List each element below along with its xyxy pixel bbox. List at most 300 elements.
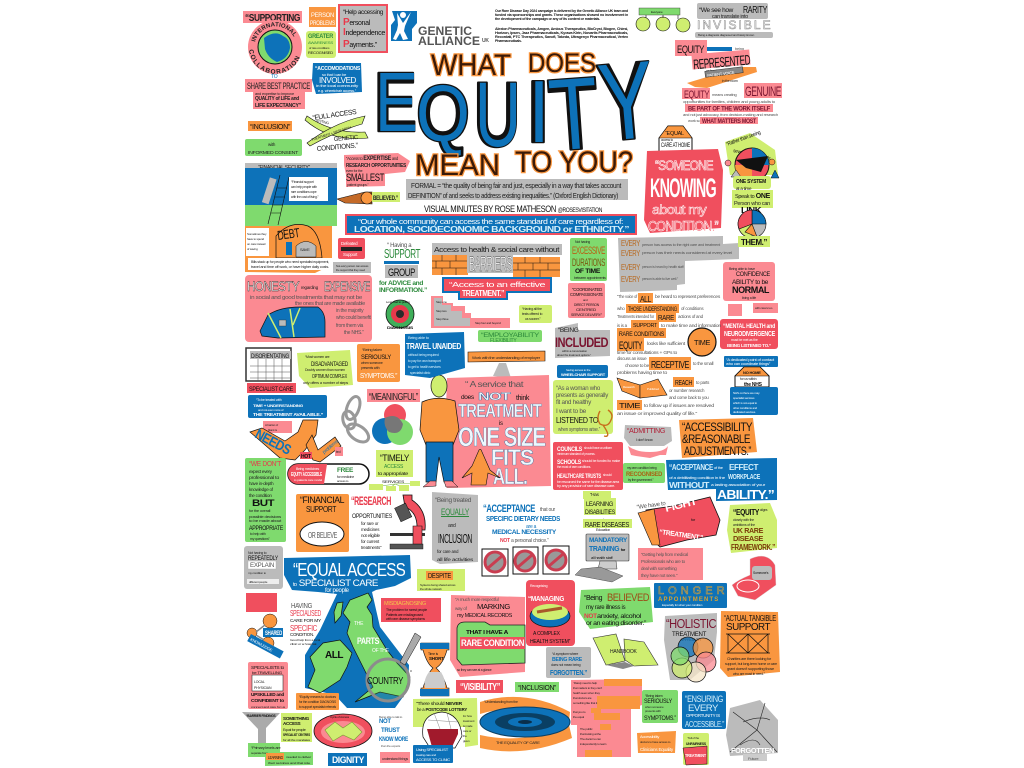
- panel: green bottom left: their services and that role: [268, 761, 311, 765]
- text block: not trust know more: Being able to talk to: [379, 715, 403, 719]
- panel: someone knowing about my condition: KNOWING: [650, 173, 716, 203]
- panel: travel unaided: specialist clinic: [410, 371, 431, 375]
- panel: rather than seeing several professionals: [725, 130, 779, 182]
- panel: fight for treatment glove: [636, 495, 720, 547]
- panel: travel unaided: without being required: [408, 353, 439, 357]
- text block: campaign statement and sponsors: Recordati, PTC Therapeutics, Sanofi, Takeda, Ultragenyx Pharmaceutical, Vertex: [495, 35, 628, 39]
- panel: financial security scene: [245, 163, 337, 273]
- panel: long pink text: the equal: [573, 715, 584, 719]
- panel: admitting teeth: [624, 425, 672, 458]
- panel: chemists schools and trusts: HEALTHCARE TRUSTS: [557, 473, 602, 480]
- panel: we don't expect: my questions”: [250, 537, 271, 541]
- panel: timely access: ACCESS: [384, 464, 404, 470]
- panel: full access to genetic conditions: “FULL ACCESS: [312, 109, 357, 122]
- panel: being treated equally and inclusion: EQUALLY: [441, 507, 470, 518]
- panel: specialists travelling: [248, 662, 288, 709]
- panel: equity means genuine: WHAT MATTERS MOST: [702, 119, 757, 125]
- panel: visibility: [456, 680, 503, 693]
- panel: disadvantaged women: DISADVANTAGED: [311, 361, 348, 368]
- panel: equal access to specialist care map: OF THE: [372, 648, 390, 654]
- panel: getting help from medical professionals: Professionals who are to: [641, 559, 686, 564]
- panel: getting help from medical professionals: they have not seen.”: [641, 573, 678, 578]
- panel: whole community statement: LOCATION, SOCIOECONOMIC BACKGROUND or ETHNICITY.”: [354, 225, 630, 234]
- panel: being taken seriously green: when someone: [645, 705, 664, 709]
- icon: needs arm wrestle: HOT: [301, 454, 311, 460]
- panel: financial security scene: travel and time off work, or have higher daily costs.: [251, 265, 329, 269]
- chart: linked pie: [738, 210, 766, 238]
- panel: financial security scene: have to spend: [247, 237, 264, 241]
- bricks: [432, 255, 468, 275]
- icon: free pill: FREE: [337, 467, 354, 474]
- panel: financial security scene: rare conditions cope: [291, 190, 317, 194]
- panel: recognised: RECOGNISED: [626, 472, 663, 478]
- panel: long pink text: health seen when they: [573, 691, 601, 695]
- credit: visual minutes: VISUAL MINUTES BY ROSE MATHESON @ROSESVISITATION: [424, 204, 602, 214]
- title: what does equity mean to you: [374, 38, 659, 182]
- panel: mental health and neurodivergence: BEING LISTENED TO.”: [727, 343, 771, 348]
- panel: postcode lottery: for how: [463, 714, 473, 718]
- panel: being included: INCLUDED: [555, 334, 608, 350]
- panel: rarity invisible: [695, 3, 773, 38]
- panel: employability flexibility: [478, 330, 542, 344]
- panel: every: [618, 236, 739, 292]
- panel: being rare not forgotten: FORGOTTEN.”: [550, 668, 587, 677]
- panel: whole community statement: “Our whole community can access the same standard of care regardless of:: [358, 217, 623, 226]
- note white: [289, 177, 328, 201]
- debt cave: [276, 224, 322, 258]
- panel: ensuring every opportunity: “ENSURING: [685, 694, 723, 704]
- panel: equity framework: FRAMEWORK.”: [731, 543, 775, 552]
- panel: access to an effective treatment: “Access to an effective: [449, 282, 546, 289]
- panel: equity means genuine: and not just advocacy, from decision-making and research: [683, 112, 778, 117]
- panel: financial security scene: can help people with: [291, 185, 317, 189]
- panel: green bottom left: LEARNING: [268, 755, 284, 760]
- panel: expertise and research opportunities: SMALLEST: [346, 172, 385, 184]
- panel: being believed: [579, 587, 653, 629]
- panel: one size fits all: NOT: [478, 391, 511, 403]
- text block: having specialised care: CARE FOR MY: [290, 618, 321, 623]
- panel: ensuring every opportunity: EVERY: [688, 703, 718, 713]
- panel: acceptance of effect: of the: [714, 465, 724, 470]
- panel: equity represented: [675, 40, 757, 88]
- icon: orange gown: [462, 449, 500, 485]
- panel: financial security scene: Sometimes they: [247, 232, 267, 236]
- icon: open orange book: Published: [647, 387, 659, 391]
- panel: postcode lottery: [413, 698, 478, 747]
- panel: we don't expect: professional to: [249, 475, 280, 480]
- panel: long pink text: independently to learn: [580, 742, 607, 746]
- panel: accommodations: “ACCOMODATIONS: [315, 66, 361, 72]
- panel: blue people note: treating care and: [416, 753, 436, 757]
- panel: greater awareness: [306, 31, 336, 58]
- panel: full access to genetic conditions: GENETIC: [334, 135, 359, 143]
- icon: NHS house: NO HOME: [743, 370, 761, 375]
- panel: actual tangible support: Charities are there looking for: [727, 657, 772, 661]
- small pink note: understand things: [382, 756, 408, 761]
- panel: green bottom left: [248, 743, 313, 766]
- panel: chemists schools and trusts: SCHOOLS: [557, 459, 582, 466]
- panel: accommodations: INVOLVED: [319, 75, 356, 85]
- panel: excessive durations of time: Not having: [575, 240, 590, 244]
- panel: blue NHS support text: other conditions and: [733, 406, 758, 410]
- panel: one size fits all: TREATMENT: [458, 401, 542, 421]
- panel: to be treated as blue: THE TREATMENT AVAILABLE.”: [253, 412, 323, 417]
- panel: greater awareness: AWARENESS: [308, 40, 334, 45]
- icon: orange bench: Work with the understanding of employer: [472, 356, 541, 360]
- panel: holistic treatment: [664, 613, 717, 682]
- panel: misdiagnosing red: with rare disease symptoms: [386, 617, 425, 621]
- label: inclusion orange: “INCLUSION”: [250, 122, 291, 131]
- panel: whole community statement: [346, 215, 636, 234]
- panel: financial support: [296, 494, 349, 552]
- icon: red cell oval: [314, 714, 372, 748]
- panel: we don't expect: the condition: [249, 493, 272, 498]
- panel: one size fits all: ONE SIZE: [458, 422, 545, 452]
- panel: being included: [555, 323, 610, 358]
- panel: to be treated as blue: TIME + UNDERSTANDING: [253, 403, 303, 408]
- panel: being treated equally and inclusion: and: [448, 523, 456, 529]
- text block: voice of all: REACH: [675, 380, 692, 387]
- icon: shared network nodes: KNOWLEDGE: [249, 637, 274, 653]
- panel: every: person has access to the right care and treatment: [642, 243, 720, 247]
- panel: personal independence payments: “Help accessing: [343, 9, 384, 16]
- panel: honesty regarding expense: [245, 275, 372, 342]
- panel: financial support: OR BELIEVE: [308, 531, 337, 540]
- title word: equity: I: [527, 62, 549, 161]
- panel: timely access: [369, 450, 420, 491]
- panel: being believed: anxiety, alcohol: [597, 614, 641, 620]
- icon: forgotten spider web cube: FORGOTTEN: [731, 748, 774, 755]
- title word: equity: Y: [594, 38, 659, 165]
- panel: repeatedly explain: [244, 546, 283, 589]
- icon: globe and bingo lottery: [423, 712, 462, 748]
- text block: voice of all: choose to be: [625, 363, 650, 368]
- panel: being rare not forgotten: “A symptom where: [552, 652, 578, 656]
- title line: mean to you: [415, 146, 633, 182]
- panel: one size fits all: does: [461, 394, 475, 401]
- panel: having all the tests: [519, 305, 552, 323]
- text block: voice of all: “The voice of: [617, 294, 638, 299]
- panel: chemists schools and trusts: be resourced the same for the disease area: [557, 480, 619, 484]
- panel: we don't expect: for the overall: [249, 508, 271, 513]
- panel: being taken seriously: presents with: [361, 366, 380, 370]
- panel: recognised: my rare condition being: [627, 466, 657, 470]
- icon: NHS house: [735, 367, 769, 388]
- panel: being rare not forgotten: does not mean being: [551, 663, 581, 667]
- panel: expertise and research opportunities: “Access to EXPERTISE and: [346, 156, 399, 162]
- panel: research opportunities: [351, 495, 425, 550]
- panel: defeated support: [338, 238, 365, 259]
- panel: learning disabilities and rare diseases: and: [598, 517, 604, 522]
- panel: lime small note: for all the mandates: [283, 738, 311, 742]
- panel: employability flexibility: “EMPLOYABILITY: [481, 332, 540, 339]
- panel: postcode lottery: given: [463, 739, 470, 743]
- icon: needs arm wrestle: NEEDS: [253, 426, 294, 458]
- panel: equal access to specialist care map: PARTS: [357, 636, 379, 646]
- panel: someone knowing about my condition: [644, 149, 723, 235]
- panel: equity means genuine: work so: [688, 118, 701, 123]
- panel: financial security scene: on care instead: [247, 242, 266, 246]
- panel: disadvantaged women: [297, 350, 353, 388]
- icon: needs arm wrestle: problems: [321, 439, 340, 456]
- panel: longer appointments: APPOINTMENTS: [658, 597, 718, 603]
- panel: having a support group: SUPPORT: [384, 246, 420, 261]
- panel: acceptance of effect: EFFECT: [729, 463, 759, 472]
- panel: expertise and research opportunities: RESEARCH OPPORTUNITIES: [346, 163, 407, 169]
- panel: despite: DESPITE: [428, 573, 452, 580]
- panel: mental health and neurodivergence: NEURODIVERGENCE: [724, 331, 776, 338]
- panel: folder medical records: way of: [455, 606, 468, 611]
- text block: acceptance of dietary needs: that our: [540, 507, 556, 513]
- icon: diagnosis target: DIAGNOSIS: [387, 325, 414, 330]
- panel: equal access to specialist care map: to SPECIALIST CARE: [293, 578, 378, 588]
- text block: voice of all: to the small: [693, 361, 714, 366]
- panel: small red note: [246, 593, 277, 612]
- panel: travel unaided: [405, 332, 465, 378]
- panel: fight for treatment glove: “We have to: [636, 501, 667, 511]
- icon: needs arm wrestle: ted: [336, 450, 341, 454]
- icons: no entry dietary signs: [482, 546, 569, 576]
- panel: personal independence payments: [339, 5, 387, 52]
- panel: equity means genuine: opportunities for families, children and young adults to: [683, 99, 776, 104]
- panel: equity represented: PATIENT VOICE: [707, 70, 735, 78]
- panel: despite: [417, 569, 465, 591]
- panel: formal definition: [406, 179, 628, 200]
- text block: voice of all: RARE CONDITIONS: [619, 331, 665, 338]
- logo: Genetic Alliance UK: ALLIANCE: [418, 36, 480, 48]
- panel: every: EVERY: [621, 263, 641, 272]
- panel: excessive durations of time: EXCESSIVE: [572, 245, 605, 257]
- panel: acceptance of effect: [666, 458, 777, 502]
- panel: orange note bottom: [296, 693, 339, 710]
- text block: voice of all: RARE: [658, 315, 675, 322]
- panel: stairs access: Step one: [436, 300, 447, 304]
- title line: what does: DOES: [528, 48, 596, 78]
- panel: financial security scene: “Financial support: [291, 180, 314, 184]
- text block: campaign statement and sponsors: Pharmaceuticals.: [495, 39, 522, 43]
- panel: stairs access: [431, 296, 510, 328]
- panel: greater awareness: GREATER: [308, 34, 334, 40]
- panel: folder medical records: THAT I HAVE A: [466, 630, 509, 636]
- panel: holistic treatment: “HOLISTIC: [666, 616, 716, 631]
- icon: diagnosis target: [386, 300, 414, 330]
- panel: repeatedly explain: different people: [249, 580, 268, 584]
- panel: orange bottom note: doctors to have access to: [640, 740, 671, 744]
- panel: having all the tests: tests offered to: [522, 312, 543, 316]
- panel: defeated support: Defeated: [341, 241, 358, 246]
- panel: equity represented: being: [735, 46, 744, 51]
- panel: accessibility and reasonable adjustments: [679, 418, 757, 458]
- panel: lime small note: SPECIALIST CENTRES: [283, 732, 310, 737]
- icon: care at home house: CARE AT HOME: [661, 143, 690, 149]
- icon: care at home house: “EQUAL: [665, 131, 684, 137]
- text block: voice of all: ALL: [640, 295, 652, 304]
- icon: free pill: [288, 464, 369, 484]
- panel: we don't expect: “WE DON’T: [249, 459, 282, 468]
- panel: defeated support: Support: [343, 252, 358, 257]
- icon: free pill: Being medicines: [296, 467, 319, 471]
- panel: formal definition: FORMAL = “the quality of being fair and just, especially in a way that takes account: [411, 181, 622, 190]
- panel: chemists schools and trusts: minimum standard of process.: [557, 452, 595, 456]
- panel: honesty regarding expense: from them via: [336, 323, 364, 329]
- panel: long pink text: The public: [580, 727, 593, 731]
- figure: man in orange: [420, 375, 459, 487]
- panel: being taken seriously: “Being taken: [362, 347, 382, 352]
- panel: we don't expect: to be made about: [249, 518, 282, 523]
- panel: repeatedly explain: Not having to: [248, 551, 267, 555]
- financial security header: [245, 163, 337, 170]
- panel: equity framework: DISEASE: [733, 536, 764, 543]
- panel: one system one person: ONE SYSTEM: [736, 179, 766, 185]
- text block: voice of all: to follow up if issues are resolved: [644, 403, 715, 408]
- text block: voice of all: TIME: [619, 401, 640, 410]
- panel: listened to: when symptoms arise.”: [558, 427, 601, 433]
- panel: having a support group: “ Having a: [387, 243, 412, 249]
- panel: fight for treatment glove: for: [691, 517, 696, 522]
- panel: coordinated compassionate: DIRECT PERSON: [574, 303, 600, 307]
- icon: monitor mandatory training: MANDATORY: [589, 538, 627, 544]
- panel: coordinated compassionate: “COORDINATED: [572, 287, 603, 292]
- panel: being believed: NOT: [584, 613, 597, 620]
- panel: equity framework: closely with the: [733, 518, 754, 522]
- text block: voice of all: to parts: [696, 380, 710, 385]
- panel: postcode lottery: “There should NEVER: [416, 701, 463, 706]
- panel: financial security scene: SAVE: [300, 247, 310, 252]
- panel: equity framework: [727, 503, 777, 553]
- panel: research opportunities: OPPORTUNITIES: [352, 513, 393, 520]
- text block: acceptance of dietary needs: “ACCEPTANCE: [483, 503, 535, 515]
- icon: hourglass: Time is: [428, 652, 438, 656]
- panel: mental health and neurodivergence: [720, 319, 778, 349]
- text block: acceptance of dietary needs: NOT a personal choice.”: [500, 538, 549, 544]
- panel: barriers: Access to health & social care without: [434, 245, 560, 254]
- panel: travel unaided: to pay for own transport: [408, 359, 441, 363]
- panel: equity represented: REPRESENTED: [693, 51, 751, 72]
- panel: blue people note: Using SPECIALIST: [416, 748, 449, 752]
- panel: coordinated compassionate: CENTRED: [576, 308, 597, 312]
- map: UK and Ireland: [308, 593, 410, 702]
- panel: specialists travelling: SPECIALISTS to: [251, 665, 285, 670]
- panel: red dish panel: Recognising: [530, 584, 548, 588]
- icon: ripple pond: [480, 697, 572, 751]
- panel: honesty regarding expense: in social and good treatments that may not be: [250, 295, 363, 301]
- panel: actual tangible support: who are most in need.”: [733, 672, 766, 676]
- panel: one size fits all: FITS: [491, 445, 533, 470]
- panel: greater awareness: RECOGNISED: [308, 50, 333, 55]
- icon: orange bench: [468, 351, 545, 378]
- icon: petri dish: [530, 605, 570, 627]
- panel: postcode lottery: treatment: [463, 719, 475, 723]
- panel: we don't expect: knowledge of: [249, 487, 274, 492]
- panel: disadvantaged women: only offers a number of steps: [303, 381, 348, 385]
- panel: lime red bag: [683, 733, 709, 765]
- icon: lime open book: [593, 634, 658, 669]
- panel: having a support group: INFORMATION.”: [379, 287, 427, 294]
- panel: research opportunities: medicines: [361, 527, 380, 532]
- panel: coordinated compassionate: SERVICE DELIVERY.”: [571, 313, 603, 317]
- panel: honesty regarding expense: HONESTY: [247, 278, 300, 294]
- text block: voice of all: who: [617, 306, 625, 311]
- panel: disorientating calendar: DISORIENTATING: [251, 353, 289, 360]
- panel: full access to genetic conditions: CONDITIONS.”: [317, 142, 359, 153]
- panel: long pink text: “Rarely need to help: [573, 681, 597, 685]
- logo: Genetic Alliance UK: GENETIC: [418, 26, 472, 38]
- panel: every: EVERY: [621, 249, 641, 258]
- panel: one system one person: THEM.”: [741, 237, 767, 247]
- panel: rarity invisible: INVISIBLE: [697, 18, 771, 32]
- text block: having specialised care: HAVING: [291, 603, 312, 610]
- panel: timely access: to appropriate: [378, 471, 409, 476]
- panel: orange note bottom: for the condition DIAGNOSIS: [299, 700, 336, 704]
- icon: open orange book: Research: [623, 385, 635, 389]
- icon: magnifying glass: ”: [410, 671, 412, 677]
- panel: confidence and ability: Being able to have: [729, 267, 755, 271]
- panel: specialists travelling: connect and care for us: [251, 705, 286, 709]
- panel: being included: “BEING: [558, 327, 579, 334]
- panel: being taken seriously green: SERIOUSLY: [644, 699, 672, 705]
- panel: listened to: fit and healthy: [556, 400, 591, 406]
- icon: diagnosis target: Long road to getting: [386, 300, 410, 304]
- icon: gray chain: [341, 395, 372, 446]
- panel: access to an effective treatment: [442, 277, 552, 300]
- panel: every: person is able to live well.”: [642, 277, 679, 281]
- text block: not trust know more: NOT: [379, 719, 391, 725]
- panel: lime red bag: “Tell of the: [687, 736, 700, 740]
- icon: green folder: [457, 622, 525, 665]
- panel: repeatedly explain: my condition to: [248, 571, 266, 575]
- panel: formal definition: DEFINITION” of and seeks to address existing inequalities.” (Oxford English Dictionary): [408, 191, 619, 200]
- panel: ensuring every opportunity: OPPORTUNITY IS: [686, 713, 720, 718]
- title word: equity: U: [475, 64, 521, 166]
- panel: having a support group: GROUP: [388, 267, 415, 279]
- panel: blue NHS support text: NHS on there we may: [733, 391, 760, 395]
- panel: holistic treatment: APPROACH: [680, 637, 701, 642]
- panel: having a support group: [379, 243, 427, 294]
- panel: green bottom left: separate from: [251, 751, 268, 755]
- panel: being treated equally and inclusion: all life activities: [437, 557, 474, 562]
- icon: free pill: for medicine: [337, 475, 354, 479]
- panel: one system one person: Person who can: [734, 201, 771, 207]
- panel: international collaboration: COLLABORATION: [249, 50, 300, 74]
- panel: greater awareness: of rare conditions: [309, 46, 330, 50]
- panel: having a support group: for ADVICE and: [379, 280, 423, 287]
- panel: equity framework: “EQUITY: [733, 508, 760, 517]
- panel: mental health and neurodivergence: must be met as the: [731, 338, 758, 342]
- panel: excessive durations of time: [570, 238, 607, 281]
- text block: not trust know more: KNOW MORE: [379, 737, 408, 743]
- panel: with informed consent: with: [268, 142, 276, 147]
- panel: rather than seeing several professionals: “Rather than seeing: [726, 130, 762, 148]
- orange underground: [245, 226, 332, 273]
- icon: NHS house: the NHS: [744, 382, 763, 388]
- panel: personal independence payments: Payments.”: [343, 39, 378, 50]
- panel: international collaboration: INTERNATIONAL: [251, 22, 296, 42]
- panel: long pink text: something like that it: [573, 701, 597, 705]
- panel: orange bottom note: [637, 731, 676, 753]
- text block: having specialised care: [290, 603, 321, 646]
- panel: one size fits all: “ A service that: [465, 380, 524, 389]
- icon: monitor mandatory training: TRAINING for: [589, 546, 626, 553]
- icon: red toilet facilities: [732, 556, 776, 600]
- panel: research opportunities: “RESEARCH: [351, 496, 391, 508]
- panel: being taken seriously green: “Being taken: [645, 694, 663, 698]
- panel: acceptance of effect: WITHOUT: [669, 480, 710, 490]
- panel: excessive durations of time: between appointments: [574, 276, 606, 280]
- logo: Genetic Alliance UK: [391, 11, 489, 48]
- panel: green bottom left: needed to deliver: [286, 755, 311, 759]
- panel: every: person is heard by health staff: [642, 265, 684, 269]
- panel: international collaboration: TO: [271, 74, 278, 80]
